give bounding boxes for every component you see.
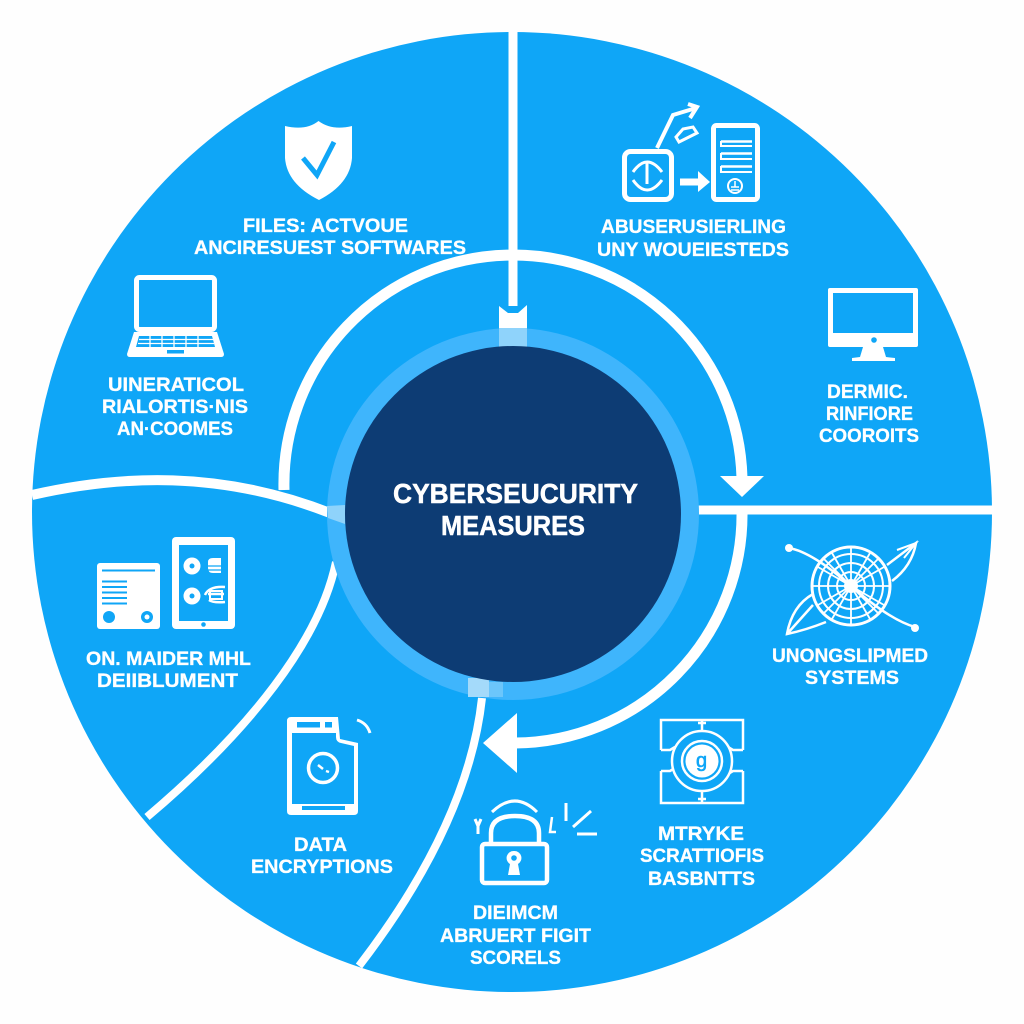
icon: device to server — [624, 104, 758, 200]
label: top right segment — [597, 217, 789, 261]
label: data encryptions: DATA — [294, 835, 347, 856]
label: key vault segment: MTRYKE — [658, 824, 744, 845]
label: laptop segment: AN·COOMES — [117, 419, 233, 440]
label: monitor segment: RINFIORE — [826, 404, 913, 425]
label: systems segment — [772, 646, 928, 689]
label: bottom segment: SCORELS — [470, 948, 561, 969]
label: key vault segment — [640, 824, 764, 890]
label: key vault segment: SCRATTIOFIS — [640, 846, 764, 867]
central hub — [327, 328, 699, 700]
label: systems segment: SYSTEMS — [805, 668, 899, 689]
arrow: clockwise arc to the right divider — [284, 255, 764, 497]
label: antivirus software: ANCIRESUEST SOFTWARES — [194, 238, 466, 259]
label: laptop segment: RIALORTIS·NIS — [102, 397, 248, 418]
label: monitor segment: DERMIC. — [827, 382, 908, 403]
arrow: top divider head — [499, 305, 527, 328]
label: top right segment: ABUSERUSIERLING — [601, 217, 786, 238]
icon: desktop monitor — [828, 288, 918, 361]
label: left segment: ON. MAIDER MHL — [86, 649, 251, 670]
icon: key vault: g — [696, 750, 707, 772]
icon: laptop — [127, 278, 224, 357]
label: bottom segment: ABRUERT FIGIT — [440, 926, 591, 947]
label: data encryptions — [251, 835, 393, 878]
arrow: clockwise arc to the bottom divider — [483, 510, 742, 773]
icon: shield — [285, 121, 352, 200]
label: data encryptions: ENCRYPTIONS — [251, 857, 393, 878]
icon: padlock — [475, 801, 597, 883]
title — [393, 478, 638, 541]
label: bottom segment: DIEIMCM — [473, 903, 558, 924]
label: antivirus software — [194, 216, 466, 259]
label: monitor segment: COOROITS — [819, 426, 919, 447]
icon: key vault — [661, 720, 743, 803]
label: top right segment: UNY WOUEIESTEDS — [597, 240, 789, 261]
icon: web globe with arrows — [785, 543, 919, 634]
label: left segment: DEIIBLUMENT — [97, 671, 238, 692]
icon: data file phone — [287, 717, 370, 815]
label: monitor segment — [819, 382, 919, 447]
label: left segment — [86, 649, 251, 692]
title: CYBERSEUCURITY — [393, 478, 638, 509]
label: laptop segment — [102, 375, 248, 440]
title: MEASURES — [441, 510, 585, 541]
label: antivirus software: FILES: ACTVOUE — [243, 216, 408, 237]
label: systems segment: UNONGSLIPMED — [772, 646, 928, 667]
label: bottom segment — [440, 903, 591, 969]
label: laptop segment: UINERATICOL — [108, 375, 244, 396]
label: key vault segment: BASBNTTS — [648, 869, 755, 890]
icon: document and tablet — [97, 537, 235, 629]
